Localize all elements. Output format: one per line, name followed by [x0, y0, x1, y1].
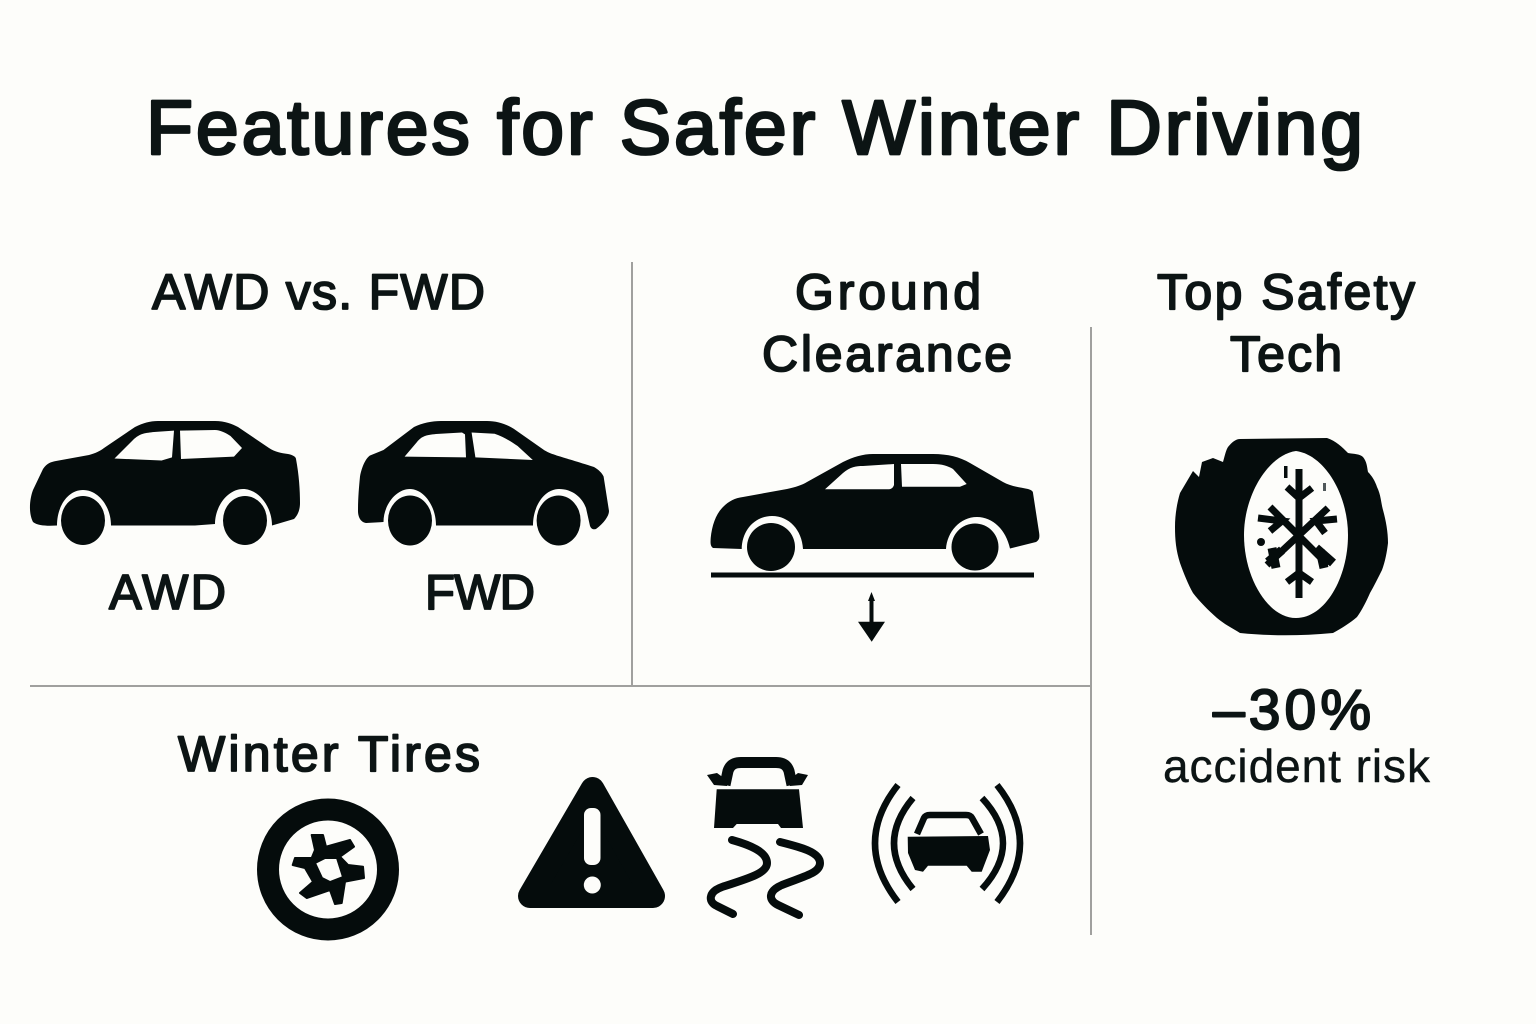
icon: tire with snowflake: [1175, 438, 1388, 635]
caption: accident risk: accident risk: [1163, 740, 1431, 792]
panel: AWD vs. FWD: [30, 264, 609, 620]
heading: AWD vs. FWD: AWD vs. FWD: [152, 264, 485, 320]
stat: -30%: –30%: [1213, 678, 1371, 742]
heading: Top Safety Tech: Top Safety: [1157, 264, 1415, 320]
heading: Ground Clearance: Clearance: [762, 326, 1012, 382]
icon: AWD car: [30, 421, 300, 545]
arrow: clearance: [858, 592, 885, 642]
icon: winter tire wheel: [268, 810, 388, 930]
heading: Winter Tires: Winter Tires: [178, 726, 480, 782]
title: Features for Safer Winter Driving: [146, 85, 1363, 171]
label: AWD: AWD: [109, 566, 226, 620]
panel: Ground Clearance: [711, 264, 1039, 642]
icon: FWD car: [358, 421, 609, 546]
panel: Winter Tires: [178, 726, 1020, 930]
icon: skidding car: [707, 762, 820, 915]
heading: Ground Clearance: Ground: [795, 264, 981, 320]
panel: Top Safety Tech: [1157, 264, 1431, 792]
icon: car above ground line: [711, 454, 1039, 578]
icon: car with sensor waves: [875, 785, 1020, 902]
icon: warning triangle: [530, 789, 653, 896]
heading: Top Safety Tech: Tech: [1230, 326, 1342, 382]
label: FWD: FWD: [425, 566, 535, 620]
